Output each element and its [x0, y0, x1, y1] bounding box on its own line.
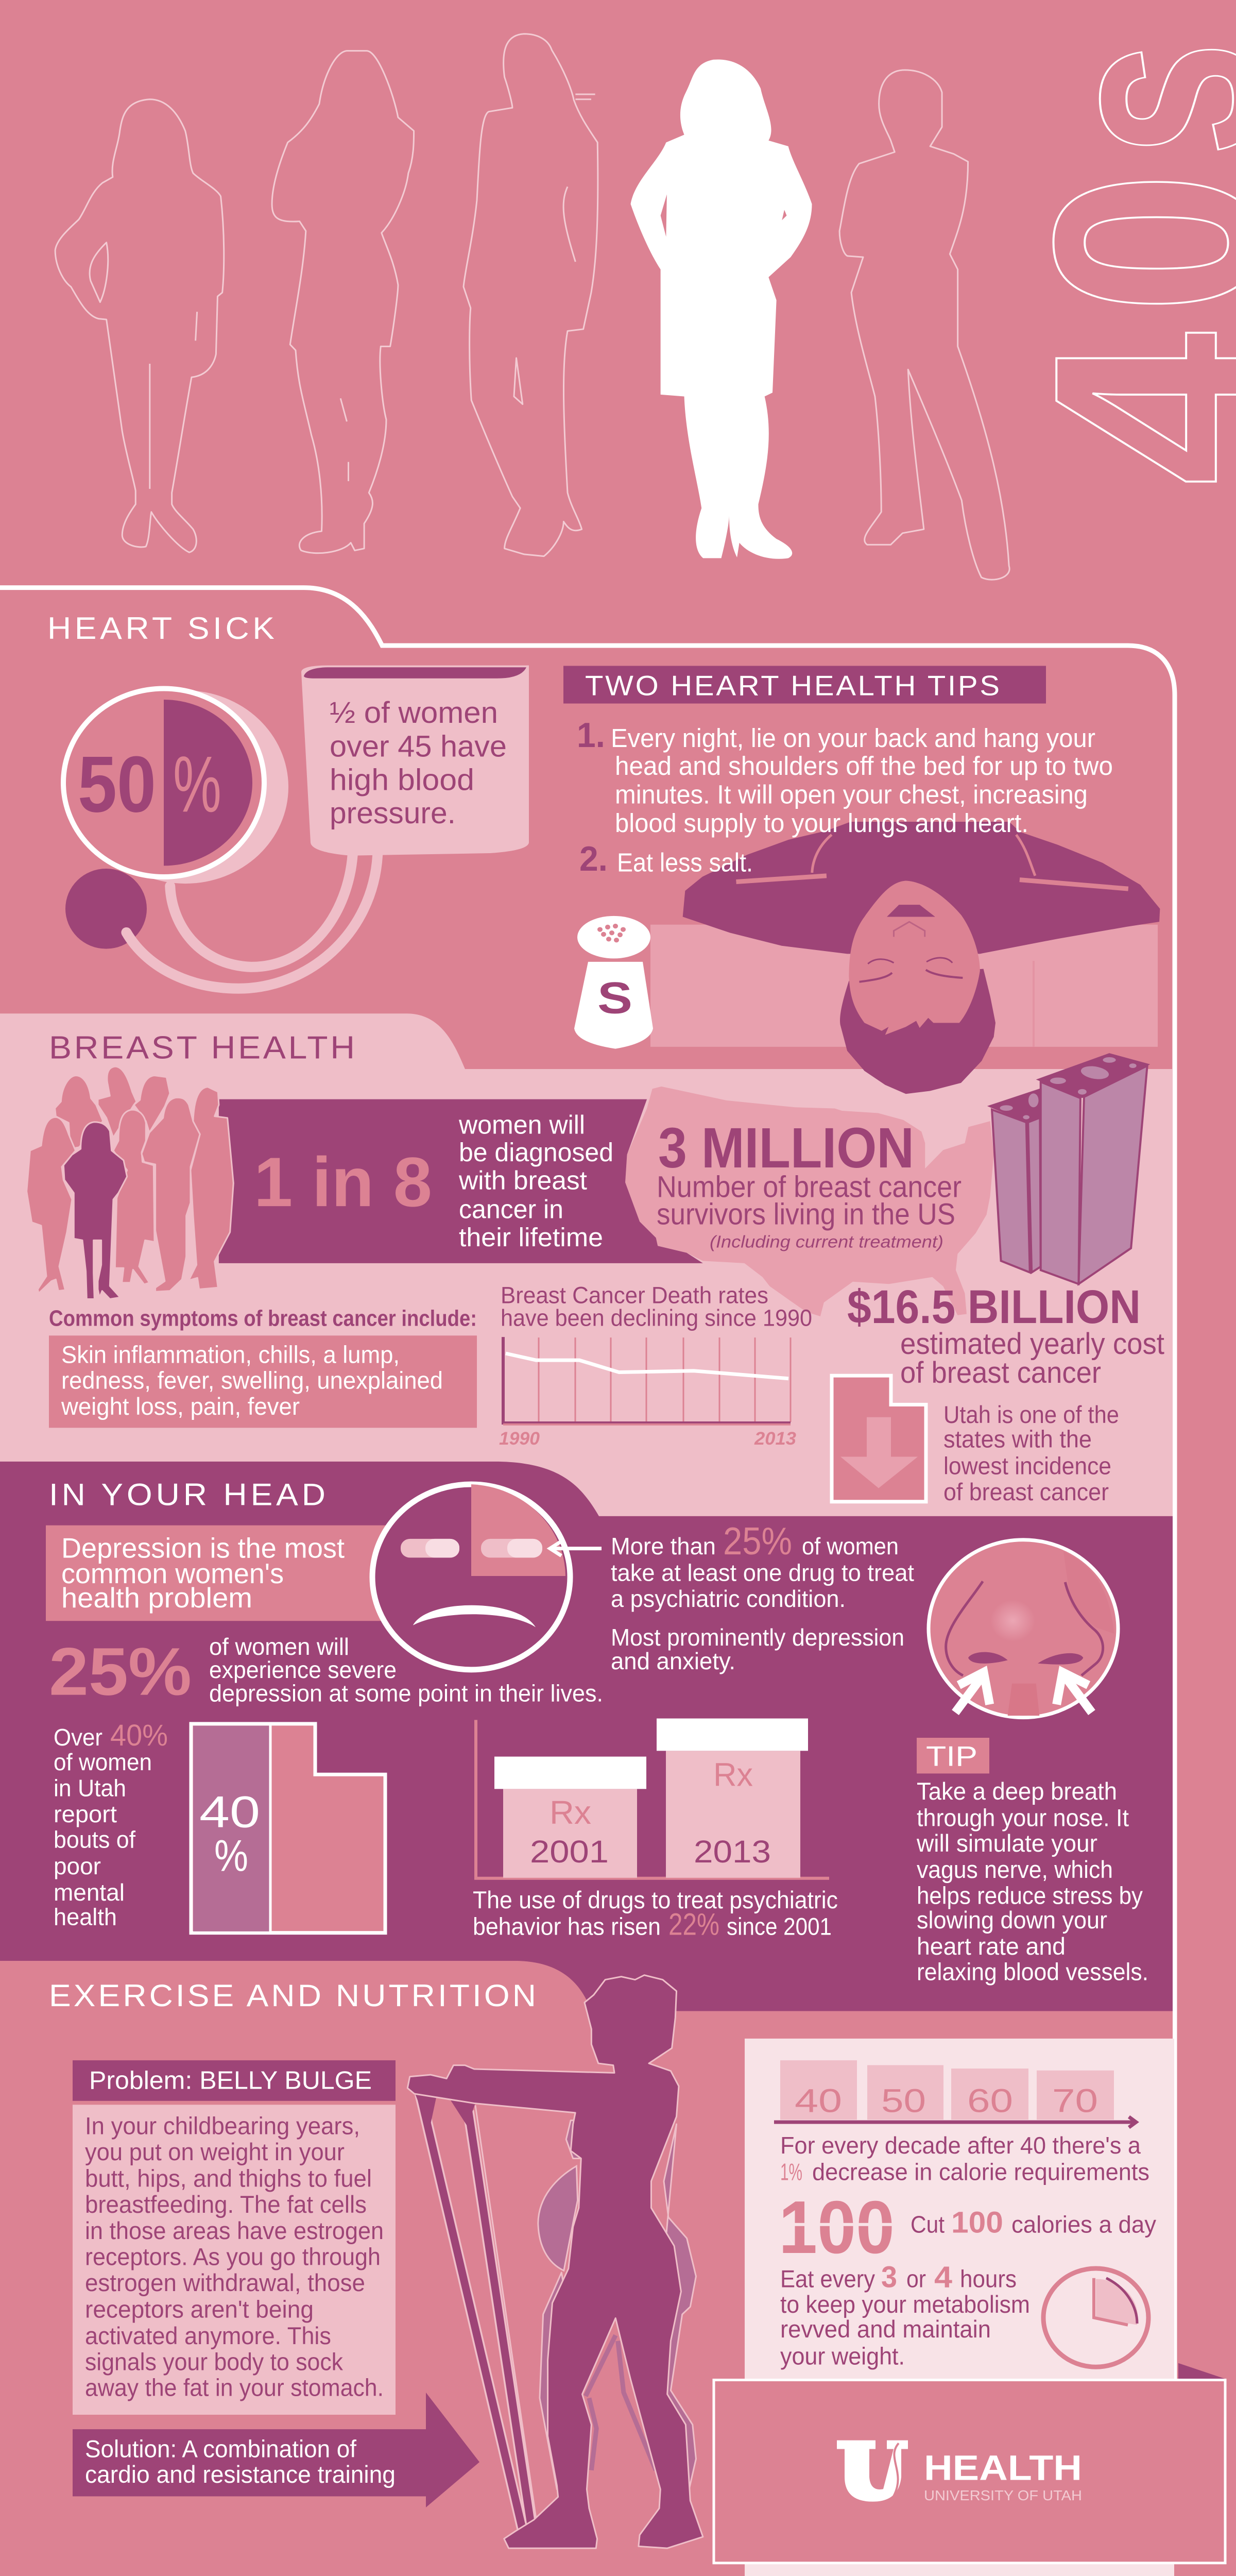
chart: decades bars: 40 — [795, 2082, 842, 2119]
callout: tip: heart rate and — [917, 1933, 1066, 1960]
text block: heart tips — [577, 716, 1113, 878]
text block: drug use — [473, 1887, 838, 1942]
text block: Utah incidence: Utah is one of the — [943, 1401, 1119, 1429]
squeeze bulb — [65, 869, 147, 949]
cuff text: high blood — [330, 763, 474, 796]
statistic caption: women will — [458, 1111, 585, 1140]
text block: Utah incidence: lowest incidence — [943, 1453, 1111, 1480]
silhouette 1 outline — [55, 99, 224, 552]
logo panel: University of Utah Health — [714, 2380, 1225, 2563]
cuff text: over 45 have — [330, 730, 507, 763]
nose lines — [946, 1581, 1103, 1675]
chart: decades bars: 50 — [881, 2082, 926, 2119]
statistic caption: be diagnosed — [459, 1138, 613, 1167]
text block: heart tips: Every night, lie on your back and hang your — [611, 724, 1095, 753]
text block: symptoms: redness, fever, swelling, unexplained — [61, 1367, 443, 1394]
callout: tip: slowing down your — [917, 1907, 1107, 1934]
nose highlight — [990, 1600, 1035, 1641]
text block: more than 25 percent: of women — [802, 1533, 899, 1560]
gauge label: 50 — [78, 739, 156, 828]
bands — [420, 2094, 536, 2529]
icon: nose with breath arrows — [929, 1540, 1118, 1718]
statistic: cut 100 calories: 100 — [951, 2206, 1003, 2239]
panel: breast health — [0, 1013, 1173, 1516]
text block: more than 25 percent: take at least one drug to treat — [611, 1560, 914, 1586]
text block: Utah incidence: of breast cancer — [943, 1479, 1109, 1506]
gauge label: % — [173, 739, 221, 828]
logo mark: block U — [837, 2441, 908, 2502]
text block: eat every 3 or 4 hours: hours — [960, 2266, 1017, 2293]
bottle 2001 — [494, 1757, 646, 1878]
shaker holes — [597, 924, 626, 942]
text block: calorie requirements: decrease in calorie requirements — [812, 2159, 1149, 2185]
text block: Utah mental health: health — [54, 1904, 117, 1930]
text block: Utah mental health: 40% — [110, 1719, 168, 1752]
callout: depression: Depression is the most — [61, 1532, 345, 1564]
pills — [401, 1539, 542, 1557]
banner: 1 in 8 — [219, 1099, 703, 1263]
statistic caption — [458, 1111, 613, 1252]
arrow: solution — [73, 2393, 479, 2507]
text block: Utah mental health: report — [54, 1801, 117, 1828]
callout: tip: Take a deep breath — [917, 1778, 1117, 1805]
body — [407, 1975, 703, 2548]
statistic: 25 percent severe depression: 25% — [49, 1634, 192, 1709]
text block: eat every 3 or 4 hours: revved and maintain — [780, 2316, 991, 2343]
text block: eat every 3 or 4 hours: 4 — [934, 2260, 953, 2294]
statistic: 16.5 billion cost: estimated yearly cost — [900, 1327, 1164, 1361]
icon: group of women — [27, 1066, 233, 1299]
nostrils — [968, 1652, 1083, 1665]
statistic: 3 million survivors: 3 MILLION — [658, 1116, 914, 1180]
text block: problem belly bulge: away the fat in your stomach. — [85, 2375, 384, 2401]
belly — [538, 2166, 578, 2270]
statistic: 16.5 billion cost — [847, 1281, 1164, 1389]
text block: drug use: 22% — [668, 1907, 719, 1942]
text block: problem belly bulge: receptors aren't being — [85, 2296, 314, 2323]
text block: Utah incidence: states with the — [943, 1426, 1092, 1453]
text block: problem belly bulge: breastfeeding. The fat cells — [85, 2192, 367, 2218]
highlighted woman — [63, 1122, 127, 1299]
statistic caption: cancer in — [459, 1195, 563, 1224]
chart title: have been declining since 1990 — [501, 1305, 812, 1331]
arrow: solution: cardio and resistance training — [85, 2462, 396, 2488]
text block: problem belly bulge: Problem: BELLY BULGE — [89, 2066, 372, 2094]
axis labels — [499, 1428, 797, 1449]
large stack — [1039, 1054, 1147, 1284]
cuff text: pressure. — [330, 796, 456, 830]
section outline: heart sick tab — [0, 588, 1175, 2380]
text block: Utah mental health: of women — [54, 1749, 152, 1775]
text block: more than 25 percent: More than — [611, 1533, 716, 1560]
gauge shadow crescent — [82, 690, 288, 884]
text block: Utah mental health: poor — [54, 1854, 101, 1880]
arrow: solution: Solution: A combination of — [85, 2436, 357, 2463]
statistic: 25 percent severe depression: of women will — [209, 1634, 349, 1660]
bottle 2013 — [657, 1719, 808, 1878]
small stack — [990, 1090, 1041, 1273]
icon: stacks of bills — [990, 1054, 1147, 1284]
shaker body — [574, 962, 653, 1049]
illustration: woman lying upside down — [683, 822, 1160, 1094]
mouth — [887, 905, 935, 917]
face quadrant — [471, 1484, 565, 1576]
hair — [840, 969, 995, 1094]
statistic: 3 million survivors: Number of breast cancer — [657, 1170, 962, 1204]
text block: Utah mental health: bouts of — [54, 1827, 136, 1853]
bottle 2001: Rx — [550, 1794, 591, 1831]
back layer — [540, 2121, 696, 2489]
statistic: 3 million survivors — [657, 1116, 962, 1251]
text block: problem belly bulge: in those areas have estrogen — [85, 2217, 384, 2244]
chart: decades bars — [774, 2060, 1136, 2127]
statistic: cut 100 calories: 100 — [779, 2185, 895, 2269]
text block: calorie requirements — [780, 2132, 1149, 2185]
breath arrows — [955, 1672, 1092, 1713]
statistic: 3 million survivors: (Including current treatment) — [710, 1232, 943, 1251]
text block: problem belly bulge: you put on weight in your — [85, 2139, 345, 2166]
torso — [683, 822, 1160, 954]
text block: eat every 3 or 4 hours — [780, 2260, 1030, 2370]
statistic: 25 percent severe depression — [49, 1634, 603, 1709]
chart title: Breast Cancer Death rates — [501, 1282, 768, 1308]
chart: breast cancer death rates — [499, 1282, 812, 1449]
cuff — [301, 665, 529, 856]
text block: calorie requirements: For every decade after 40 there's a — [780, 2132, 1141, 2159]
text block: more than 25 percent: 25% — [723, 1520, 792, 1563]
heading bar: two heart health tips: TWO HEART HEALTH TIPS — [585, 670, 1000, 701]
text block: Utah mental health: mental — [54, 1879, 125, 1906]
cuff text: ½ of women — [330, 696, 498, 730]
text block: calorie requirements: 1% — [780, 2159, 802, 2185]
statistic: 16.5 billion cost: $16.5 BILLION — [847, 1281, 1141, 1333]
value: % — [214, 1831, 248, 1880]
callout: tip: through your nose. It — [917, 1805, 1129, 1832]
arrow: pills to text — [550, 1541, 602, 1556]
logo wordmark: HEALTH — [924, 2448, 1082, 2487]
statistic: cut 100 calories: calories a day — [1011, 2212, 1156, 2238]
shaker letter: S — [597, 973, 632, 1023]
text block: eat every 3 or 4 hours: 3 — [881, 2260, 897, 2294]
shaker cap — [577, 916, 650, 958]
heading: heart sick: HEART SICK — [47, 612, 274, 646]
bottle 2013: 2013 — [694, 1835, 771, 1869]
text block: problem belly bulge: butt, hips, and thighs to fuel — [85, 2165, 372, 2192]
text block: Utah incidence — [943, 1401, 1119, 1506]
icon: US map — [625, 1087, 994, 1316]
callout: tip: will simulate your — [916, 1831, 1097, 1857]
text block: Utah mental health: Over — [54, 1724, 102, 1751]
callout: depression: health problem — [61, 1582, 252, 1614]
heading: exercise and nutrition: EXERCISE AND NUTRITION — [49, 1979, 536, 2013]
text block: more than 25 percent: Most prominently depression — [611, 1624, 904, 1651]
panel: exercise and nutrition — [0, 1961, 1173, 2576]
tubes — [126, 855, 377, 989]
arm creases — [736, 835, 1128, 889]
text block: problem belly bulge: signals your body to sock — [85, 2349, 344, 2376]
cheek shade — [1063, 1552, 1114, 1634]
text block: heart tips: minutes. It will open your chest, increasing — [615, 781, 1088, 809]
silhouette 3 outline — [464, 34, 598, 556]
chart: decades bars: 70 — [1052, 2082, 1098, 2119]
text block: symptoms: Skin inflammation, chills, a lump, — [61, 1342, 400, 1368]
bottle 2013: Rx — [713, 1756, 753, 1793]
gauge dark half — [164, 700, 252, 866]
text block: heart tips: head and shoulders off the bed for up to two — [615, 752, 1113, 781]
text block: more than 25 percent: and anxiety. — [611, 1648, 735, 1675]
panel: nutrition facts — [745, 2039, 1174, 2576]
statistic: 3 million survivors: survivors living in the US — [657, 1198, 955, 1231]
text block: more than 25 percent — [611, 1520, 914, 1675]
silhouette 2 outline — [272, 51, 414, 553]
cuff opening — [304, 667, 526, 679]
text block: more than 25 percent: a psychiatric condition. — [611, 1586, 846, 1613]
axes — [503, 1337, 791, 1423]
number two: 2. — [579, 839, 608, 878]
chart: prescription bottles — [476, 1719, 829, 1878]
statistic: 16.5 billion cost: of breast cancer — [900, 1356, 1101, 1389]
statistic: 25 percent severe depression: experience severe — [209, 1657, 397, 1683]
callout: tip: vagus nerve, which — [917, 1856, 1113, 1883]
heading: breast health: BREAST HEALTH — [49, 1029, 355, 1065]
callout: depression: common women's — [61, 1558, 284, 1589]
inner leg shading — [586, 2335, 656, 2470]
text block: Utah mental health — [54, 1719, 168, 1930]
heading: in your head: IN YOUR HEAD — [49, 1478, 325, 1512]
illustration: woman with resistance band — [407, 1975, 703, 2548]
trend line — [506, 1353, 788, 1379]
text block: problem belly bulge: In your childbearing years, — [85, 2113, 360, 2140]
silhouette 4 highlighted in white — [630, 59, 812, 559]
value: 40 — [199, 1787, 260, 1837]
gauge face — [63, 688, 264, 877]
text block: problem belly bulge — [73, 2060, 396, 2415]
text block: symptoms: weight loss, pain, fever — [61, 1393, 300, 1420]
callout: tip: relaxing blood vessels. — [917, 1959, 1148, 1986]
text block: eat every 3 or 4 hours: your weight. — [780, 2343, 905, 2370]
icon: clock — [1043, 2268, 1148, 2367]
value — [199, 1787, 260, 1880]
text block: drug use: behavior has risen — [473, 1913, 661, 1940]
text block: heart tips: Eat less salt. — [617, 849, 753, 877]
text block: heart tips: blood supply to your lungs and heart. — [615, 809, 1028, 838]
callout: depression — [46, 1526, 386, 1621]
statistic caption: their lifetime — [459, 1223, 603, 1252]
decorative corner fold — [1178, 2363, 1226, 2379]
icon: blood pressure gauge, cuff and tubes — [63, 665, 529, 989]
text block: drug use: since 2001 — [727, 1913, 832, 1940]
text block: symptoms: Common symptoms of breast cancer include: — [49, 1307, 477, 1331]
timeline arrow — [774, 2117, 1136, 2127]
row of five women silhouettes — [55, 34, 1009, 580]
statistic: 25 percent severe depression: depression at some point in their lives. — [209, 1681, 603, 1707]
chart: decades bars: 60 — [967, 2082, 1013, 2119]
bottle 2001: 2001 — [530, 1835, 609, 1869]
nose and eyes — [859, 922, 963, 982]
statistic: cut 100 calories — [775, 2185, 1156, 2269]
illustration: bed — [650, 925, 1158, 1047]
panel: in your head — [0, 1462, 1173, 2013]
gauge label — [78, 739, 221, 828]
face — [849, 881, 980, 1035]
text block: problem belly bulge: receptors. As you go through — [85, 2244, 381, 2270]
illustration: salt shaker — [574, 916, 653, 1049]
statistic: cut 100 calories: Cut — [911, 2212, 945, 2238]
icon: Utah with down arrow — [832, 1376, 926, 1502]
text block: symptoms — [49, 1307, 477, 1428]
callout: tip: helps reduce stress by — [917, 1883, 1143, 1909]
septum — [1008, 1684, 1039, 1716]
text block: problem belly bulge: activated anymore. This — [85, 2323, 331, 2350]
text block: drug use: The use of drugs to treat psychiatric — [473, 1887, 838, 1913]
text block: eat every 3 or 4 hours: Eat every — [780, 2266, 876, 2293]
mouth — [413, 1605, 536, 1627]
axis labels: 1990 — [499, 1428, 540, 1449]
text block: eat every 3 or 4 hours: or — [906, 2266, 926, 2293]
icon: sad face with pills — [372, 1484, 570, 1670]
statistic caption: with breast — [458, 1166, 587, 1195]
statistic: 1 in 8 — [254, 1143, 432, 1221]
number one: 1. — [577, 716, 605, 754]
text block: eat every 3 or 4 hours: to keep your metabolism — [780, 2292, 1030, 2318]
text block: problem belly bulge: estrogen withdrawal, those — [85, 2269, 365, 2297]
axis labels: 2013 — [754, 1428, 797, 1449]
silhouette 5 outline — [839, 70, 1009, 580]
logo subline: UNIVERSITY OF UTAH — [924, 2488, 1082, 2504]
text block: Utah mental health: in Utah — [54, 1775, 126, 1802]
big rotated outline 40s — [993, 41, 1236, 486]
cuff text — [330, 696, 507, 830]
chart: Utah 40 percent — [191, 1724, 385, 1933]
callout: tip: TIP — [926, 1740, 977, 1772]
callout: tip — [916, 1738, 1148, 1986]
chart title — [501, 1282, 812, 1331]
band handles — [415, 2092, 476, 2130]
